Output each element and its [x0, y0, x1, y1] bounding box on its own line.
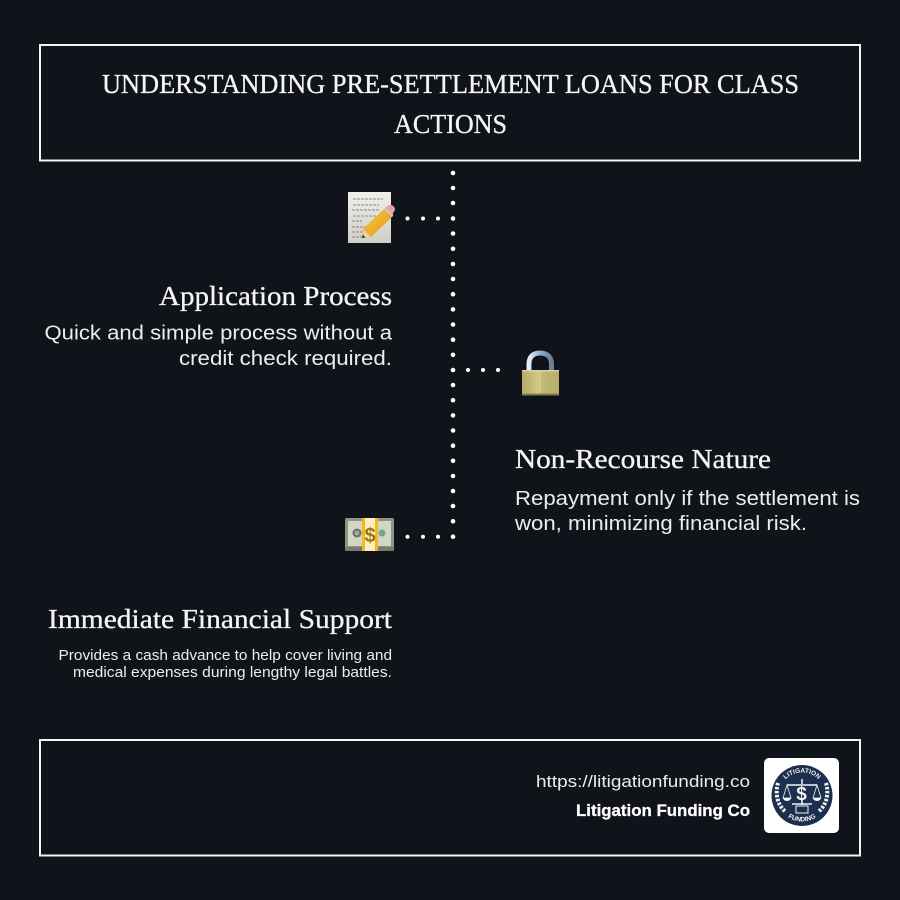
- body: Application Process: [44, 322, 393, 370]
- body: Application Process: Quick and simple process without a: [44, 322, 393, 344]
- title heading: ACTIONS: [394, 108, 507, 139]
- body: Immediate Financial Support: Provides a cash advance to help cover living and: [58, 648, 392, 664]
- body: Non-Recourse Nature: [514, 487, 860, 535]
- footer panel: [39, 739, 861, 856]
- icon: company logo: [764, 758, 839, 833]
- title heading: UNDERSTANDING PRE-SETTLEMENT LOANS FOR CLASS: [102, 68, 799, 99]
- icon: banknotes: [345, 518, 394, 551]
- Non-Recourse Nature text block: [514, 444, 860, 535]
- Application Process text block: [44, 281, 393, 370]
- body: Non-Recourse Nature: Repayment only if the settlement is: [515, 487, 860, 510]
- body: Non-Recourse Nature: won, minimizing financial risk.: [514, 512, 807, 535]
- title heading: [102, 68, 799, 139]
- icon: company logo: LITIGATION: [783, 768, 821, 780]
- heading: Application Process: Application Process: [159, 281, 392, 311]
- dotted timeline: [406, 171, 500, 539]
- icon: padlock: [522, 353, 559, 396]
- icon: company logo: $: [796, 784, 807, 805]
- heading: Non-Recourse Nature: Non-Recourse Nature: [515, 444, 771, 474]
- footer brand name: Litigation Funding Co: [576, 801, 750, 820]
- body: Immediate Financial Support: medical expenses during lengthy legal battles.: [73, 665, 392, 681]
- title panel: [40, 45, 860, 160]
- footer url: https://litigationfunding.co: [536, 772, 750, 791]
- icon: memo with pencil: [348, 192, 395, 243]
- heading: Immediate Financial Support: Immediate Financial Support: [48, 604, 393, 634]
- body: Application Process: credit check required.: [179, 347, 392, 370]
- body: Immediate Financial Support: [58, 648, 392, 681]
- Immediate Financial Support text block: [48, 604, 393, 681]
- icon: banknotes: $: [364, 525, 376, 547]
- icon: company logo: FUNDING: [788, 814, 816, 822]
